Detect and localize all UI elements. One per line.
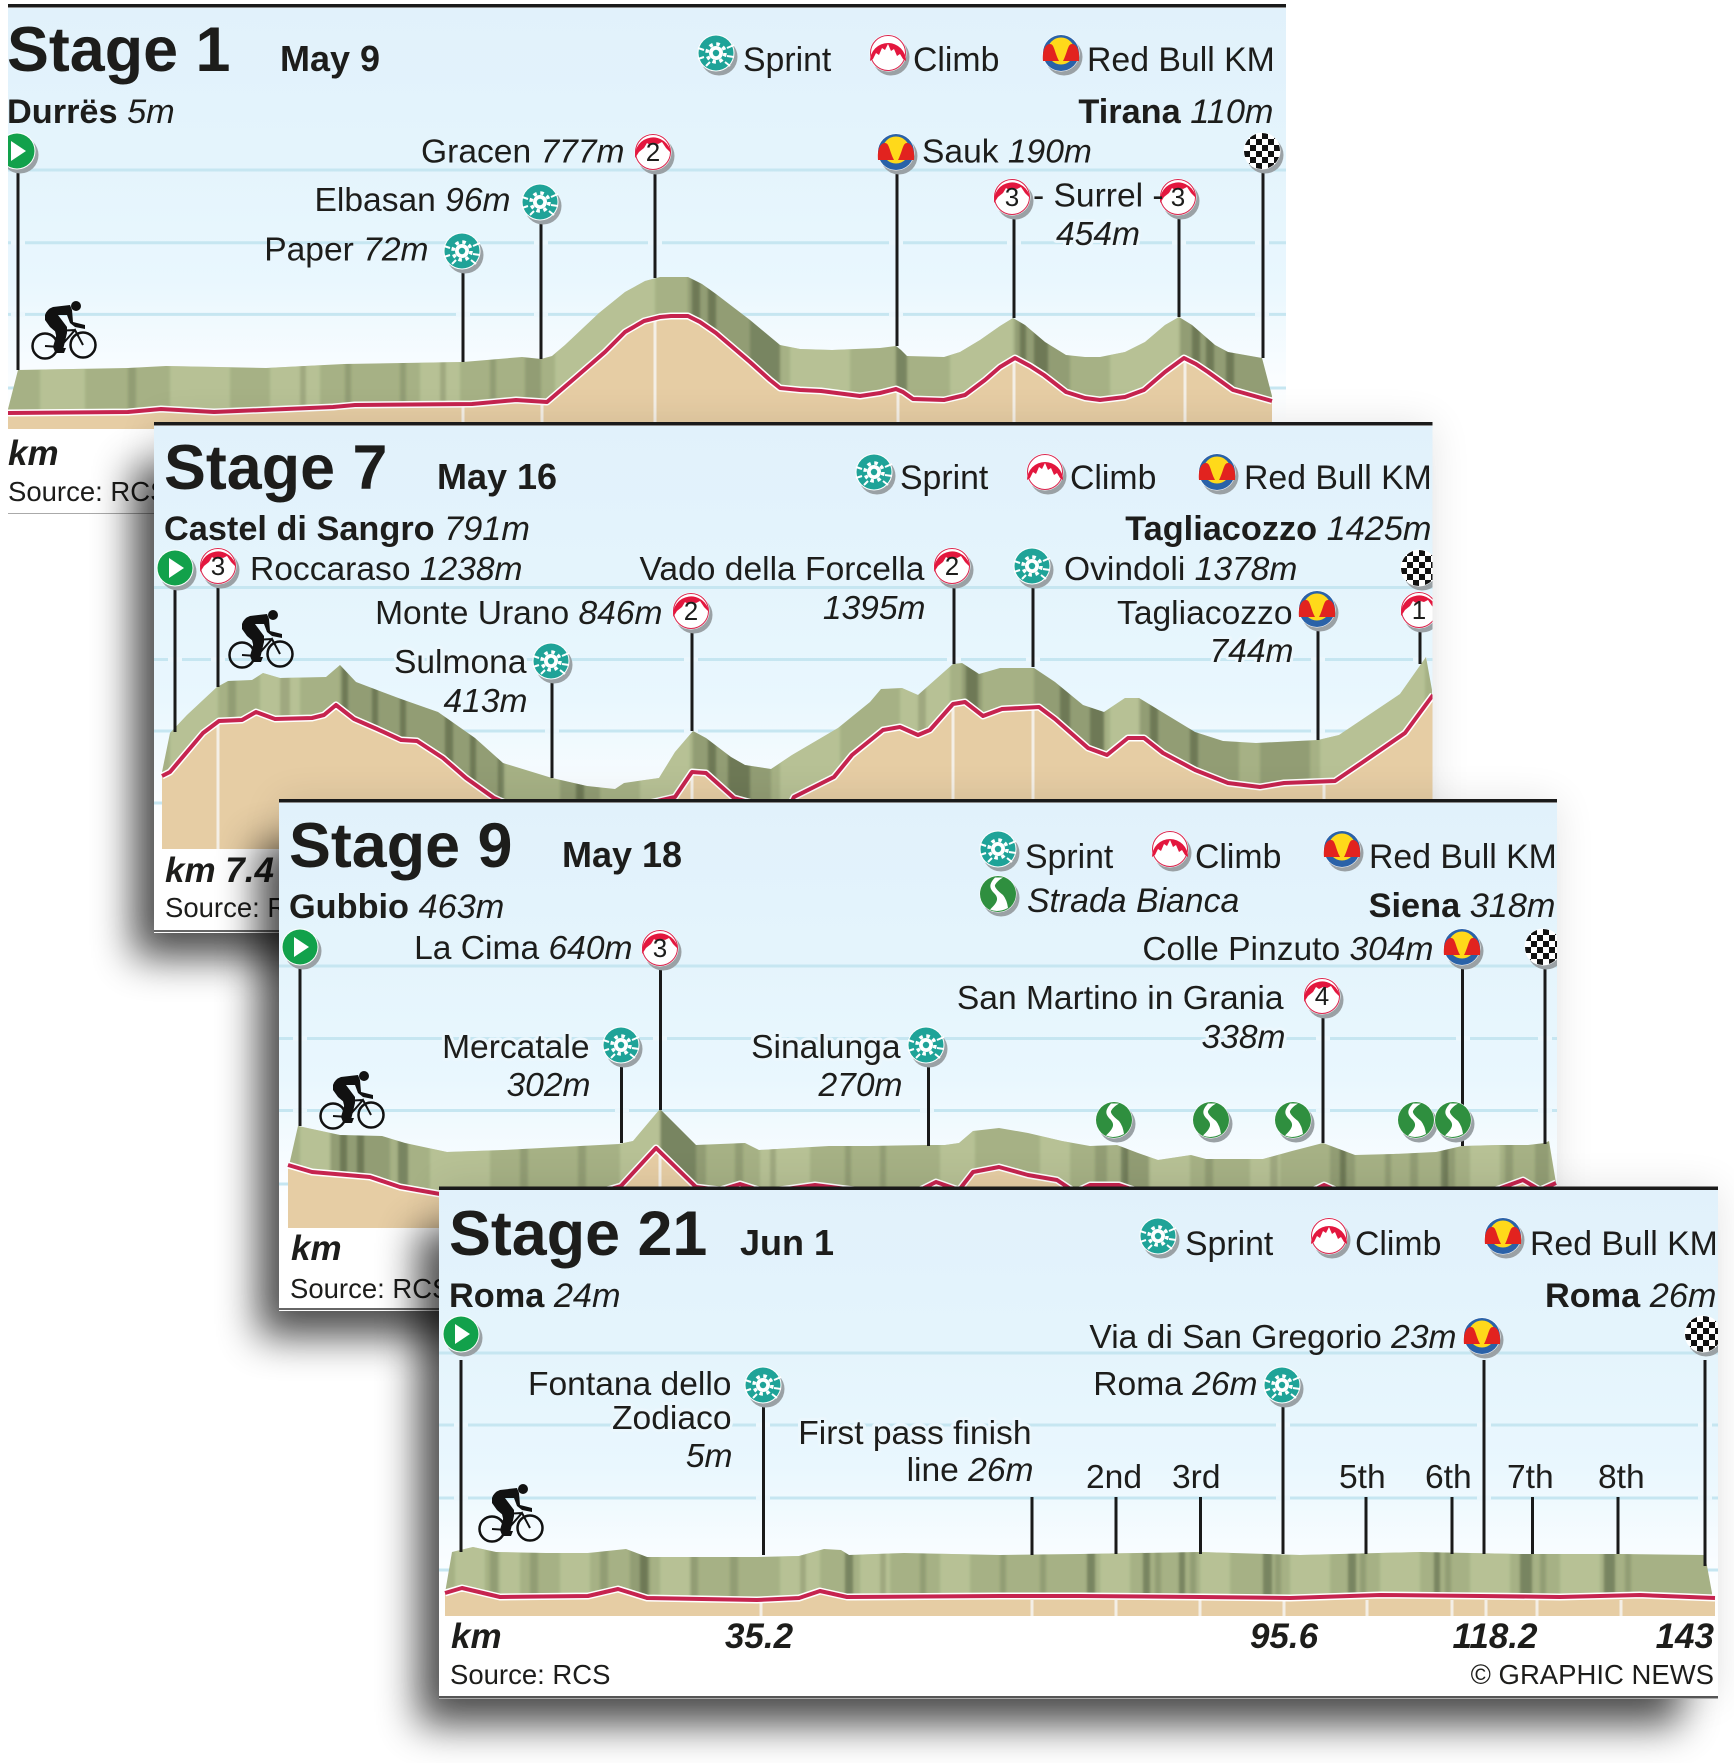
marker: Sinalunga sprint: 270m [818, 1067, 902, 1104]
marker: Sauk Red Bull KM [878, 134, 1092, 346]
marker: finish and final climb: 1 [1412, 595, 1426, 625]
legend: stage 1: Climb [913, 41, 999, 79]
marker: Monte Urano climb [375, 592, 712, 731]
marker: finish [1684, 1316, 1724, 1566]
marker: Gracen climb: Gracen 777m [421, 134, 624, 170]
marker: Gracen climb: 2 [646, 137, 660, 167]
markers: lap passes: 3rd [1172, 1459, 1221, 1496]
marker: Ovindoli sprint [1014, 548, 1297, 667]
elevation profile: stage 21 [439, 1540, 1718, 1618]
markers: lap passes [1086, 1459, 1645, 1554]
finish town: Siena: Siena 318m [1369, 887, 1556, 925]
marker: Surrel climbs: 454m [1056, 216, 1140, 253]
marker: Roma sprint [1093, 1366, 1304, 1554]
marker: Elbasan sprint [314, 182, 562, 359]
title: Stage 9: Stage 9 [289, 811, 512, 881]
marker: finish [1524, 928, 1564, 1144]
marker: Paper sprint: Paper 72m [264, 232, 428, 268]
markers: lap passes: 8th [1598, 1459, 1645, 1496]
marker: Surrel climbs [994, 178, 1200, 318]
legend: stage 7 [856, 454, 1432, 497]
marker: Via di San Gregorio Red Bull KM [1089, 1318, 1504, 1554]
marker: Fontana dello Zodiaco sprint [528, 1366, 784, 1555]
marker: Tagliacozzo Red Bull KM: 744m [1210, 633, 1294, 670]
icon: cyclist [230, 610, 292, 668]
marker: San Martino in Grania climb [957, 978, 1344, 1143]
legend: stage 21: Red Bull KM [1530, 1225, 1718, 1263]
markers: lap passes: 5th [1339, 1459, 1386, 1496]
credit: © GRAPHIC NEWS [1471, 1659, 1714, 1690]
marker: Vado della Forcella climb: 2 [945, 551, 959, 581]
panel: stage 21 [439, 1186, 1724, 1699]
legend: stage 9: Climb [1195, 838, 1281, 876]
marker: Colle Pinzuto Red Bull KM [1142, 928, 1484, 1146]
marker: Roma sprint: Roma 26m [1093, 1366, 1258, 1403]
marker: Gracen climb [421, 134, 674, 278]
title: Stage 7: Stage 7 [164, 433, 387, 503]
distance axis: 95.6 [1250, 1617, 1319, 1656]
marker: Sinalunga sprint [751, 1026, 948, 1146]
legend: stage 21 [1140, 1218, 1718, 1263]
marker: Tagliacozzo Red Bull KM [1117, 590, 1338, 740]
distance axis: km [451, 1617, 502, 1656]
legend: stage 1: Sprint [743, 41, 832, 79]
marker: Vado della Forcella climb: 1395m [823, 590, 926, 627]
marker: Fontana dello Zodiaco sprint: 5m [686, 1438, 732, 1475]
date: May 16: May 16 [437, 456, 557, 497]
marker: Sauk Red Bull KM: Sauk 190m [922, 134, 1092, 170]
marker: Mercatale sprint: 302m [506, 1067, 590, 1104]
start town: Roma: Roma 24m [449, 1277, 621, 1315]
marker: start [282, 928, 322, 1126]
marker: La Cima climb: 3 [653, 933, 667, 963]
markers: lap passes: 7th [1507, 1459, 1554, 1496]
marker: Roccaraso climb: 3 [211, 551, 225, 581]
marker: Colle Pinzuto Red Bull KM: Colle Pinzuto 304m [1142, 931, 1434, 968]
axis label: km: km [291, 1229, 342, 1268]
legend: stage 1 [698, 34, 1275, 79]
marker: Monte Urano climb: 2 [684, 596, 698, 626]
axis label: km: km [8, 434, 59, 473]
finish town: Tirana: Tirana 110m [1078, 93, 1274, 131]
icon: cyclist [480, 1484, 542, 1542]
icon: cyclist [32, 301, 96, 358]
legend: stage 9: Strada Bianca [1027, 882, 1239, 920]
marker: Vado della Forcella climb [640, 548, 974, 664]
source: Source: RCS [450, 1659, 610, 1690]
distance axis: 35.2 [725, 1617, 794, 1656]
marker: Sulmona sprint: Sulmona [394, 644, 527, 681]
marker: Roccaraso climb [200, 548, 522, 687]
panel: stage 9 [279, 799, 1564, 1311]
markers: lap passes: 6th [1425, 1459, 1472, 1496]
marker: Elbasan sprint: Elbasan 96m [314, 182, 510, 219]
start town: Castel di Sangro: Castel di Sangro 791m [164, 510, 530, 548]
marker: Sulmona sprint: 413m [444, 683, 528, 720]
icons: strada bianca sectors [1096, 1102, 1474, 1142]
legend: stage 9: Red Bull KM [1369, 838, 1557, 876]
date: May 18: May 18 [562, 834, 682, 875]
marker: first pass finish line: line 26m [907, 1452, 1034, 1489]
distance axis: 143 [1656, 1617, 1715, 1656]
distance axis: 118.2 [1452, 1617, 1538, 1656]
marker: La Cima climb: La Cima 640m [414, 930, 632, 967]
marker: finish [1244, 132, 1284, 358]
date: Jun 1: Jun 1 [740, 1222, 834, 1263]
marker: Ovindoli sprint: Ovindoli 1378m [1064, 551, 1297, 588]
marker: start [8, 132, 38, 370]
markers: lap passes: 2nd [1086, 1459, 1142, 1496]
finish town: Roma: Roma 26m [1545, 1277, 1716, 1315]
title: Stage 21: Stage 21 [449, 1199, 707, 1269]
marker: first pass finish line [798, 1415, 1034, 1555]
icon: cyclist [320, 1071, 384, 1128]
panel: stage 1 [0, 4, 1286, 515]
marker: Surrel climbs: - Surrel - [1033, 178, 1164, 214]
distance axis [451, 1617, 1715, 1656]
legend: stage 21: Sprint [1185, 1225, 1274, 1263]
marker: Via di San Gregorio Red Bull KM: Via di San Gregorio 23m [1089, 1319, 1456, 1356]
marker: Mercatale sprint: Mercatale [442, 1029, 590, 1066]
marker: San Martino in Grania climb: 4 [1315, 981, 1329, 1011]
marker: Monte Urano climb: Monte Urano 846m [375, 595, 662, 632]
start town: Gubbio: Gubbio 463m [289, 888, 504, 926]
marker: San Martino in Grania climb: San Martino in Grania [957, 980, 1284, 1017]
marker: San Martino in Grania climb: 338m [1202, 1019, 1286, 1056]
legend: stage 9 [980, 830, 1557, 920]
marker: Sinalunga sprint: Sinalunga [751, 1029, 901, 1066]
legend: stage 7: Red Bull KM [1244, 459, 1432, 497]
elevation profile: stage 1 [8, 270, 1278, 430]
marker: Vado della Forcella climb: Vado della Forcella [640, 551, 925, 588]
marker: La Cima climb [414, 930, 682, 1110]
marker: start [156, 550, 196, 732]
start town: Durrës: Durrës 5m [7, 93, 175, 131]
marker: Fontana dello Zodiaco sprint: Fontana dello [528, 1366, 732, 1403]
marker: Sulmona sprint [394, 642, 572, 778]
legend: stage 7: Climb [1070, 459, 1156, 497]
legend: stage 9: Sprint [1025, 838, 1114, 876]
marker: Tagliacozzo Red Bull KM: Tagliacozzo [1117, 595, 1292, 632]
marker: start [442, 1316, 482, 1552]
marker: first pass finish line: First pass finish [798, 1415, 1032, 1452]
axis label and first distance: km 7.4 [165, 851, 274, 890]
source: Source: RCS [290, 1273, 450, 1304]
source: Source: RCS [8, 476, 168, 507]
date: May 9: May 9 [280, 38, 380, 79]
legend: stage 1: Red Bull KM [1087, 41, 1275, 79]
title: Stage 1: Stage 1 [7, 15, 230, 85]
marker: Roccaraso climb: Roccaraso 1238m [250, 551, 522, 588]
legend: stage 7: Sprint [900, 459, 989, 497]
marker: Fontana dello Zodiaco sprint: Zodiaco [612, 1400, 732, 1437]
marker: Surrel climbs: 3 [1171, 182, 1185, 212]
marker: finish and final climb [1400, 550, 1440, 664]
elevation profile: stage 9 [279, 1100, 1557, 1230]
source: Source: RCS [165, 892, 325, 923]
legend: stage 21: Climb [1355, 1225, 1441, 1263]
marker: Paper sprint [264, 232, 484, 362]
elevation profile: stage 7 [154, 650, 1433, 850]
panel: stage 7 [154, 422, 1440, 933]
marker: Surrel climbs: 3 [1005, 182, 1019, 212]
finish town: Tagliacozzo: Tagliacozzo 1425m [1125, 510, 1432, 548]
marker: Mercatale sprint [442, 1026, 642, 1143]
